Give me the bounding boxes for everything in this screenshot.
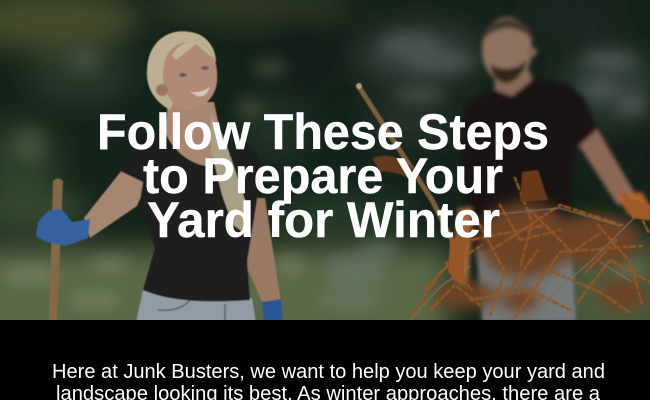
rake handle: [356, 83, 452, 240]
intro paragraph: Here at Junk Busters, we want to help you keep your yard and: [52, 361, 605, 383]
black text band: [0, 320, 650, 400]
man (blurred background figure): [452, 17, 650, 322]
intro paragraph: [52, 361, 605, 400]
leaf clusters: [372, 156, 650, 285]
foliage and meadow mottling: [2, 33, 648, 310]
dark overlay: [0, 0, 650, 320]
title: Follow These Steps: [97, 104, 549, 160]
title: [97, 104, 549, 248]
title: Yard for Winter: [147, 192, 500, 248]
title: to Prepare Your: [143, 148, 503, 204]
woman holding a rake: [36, 31, 283, 322]
dry branches: [410, 178, 650, 320]
